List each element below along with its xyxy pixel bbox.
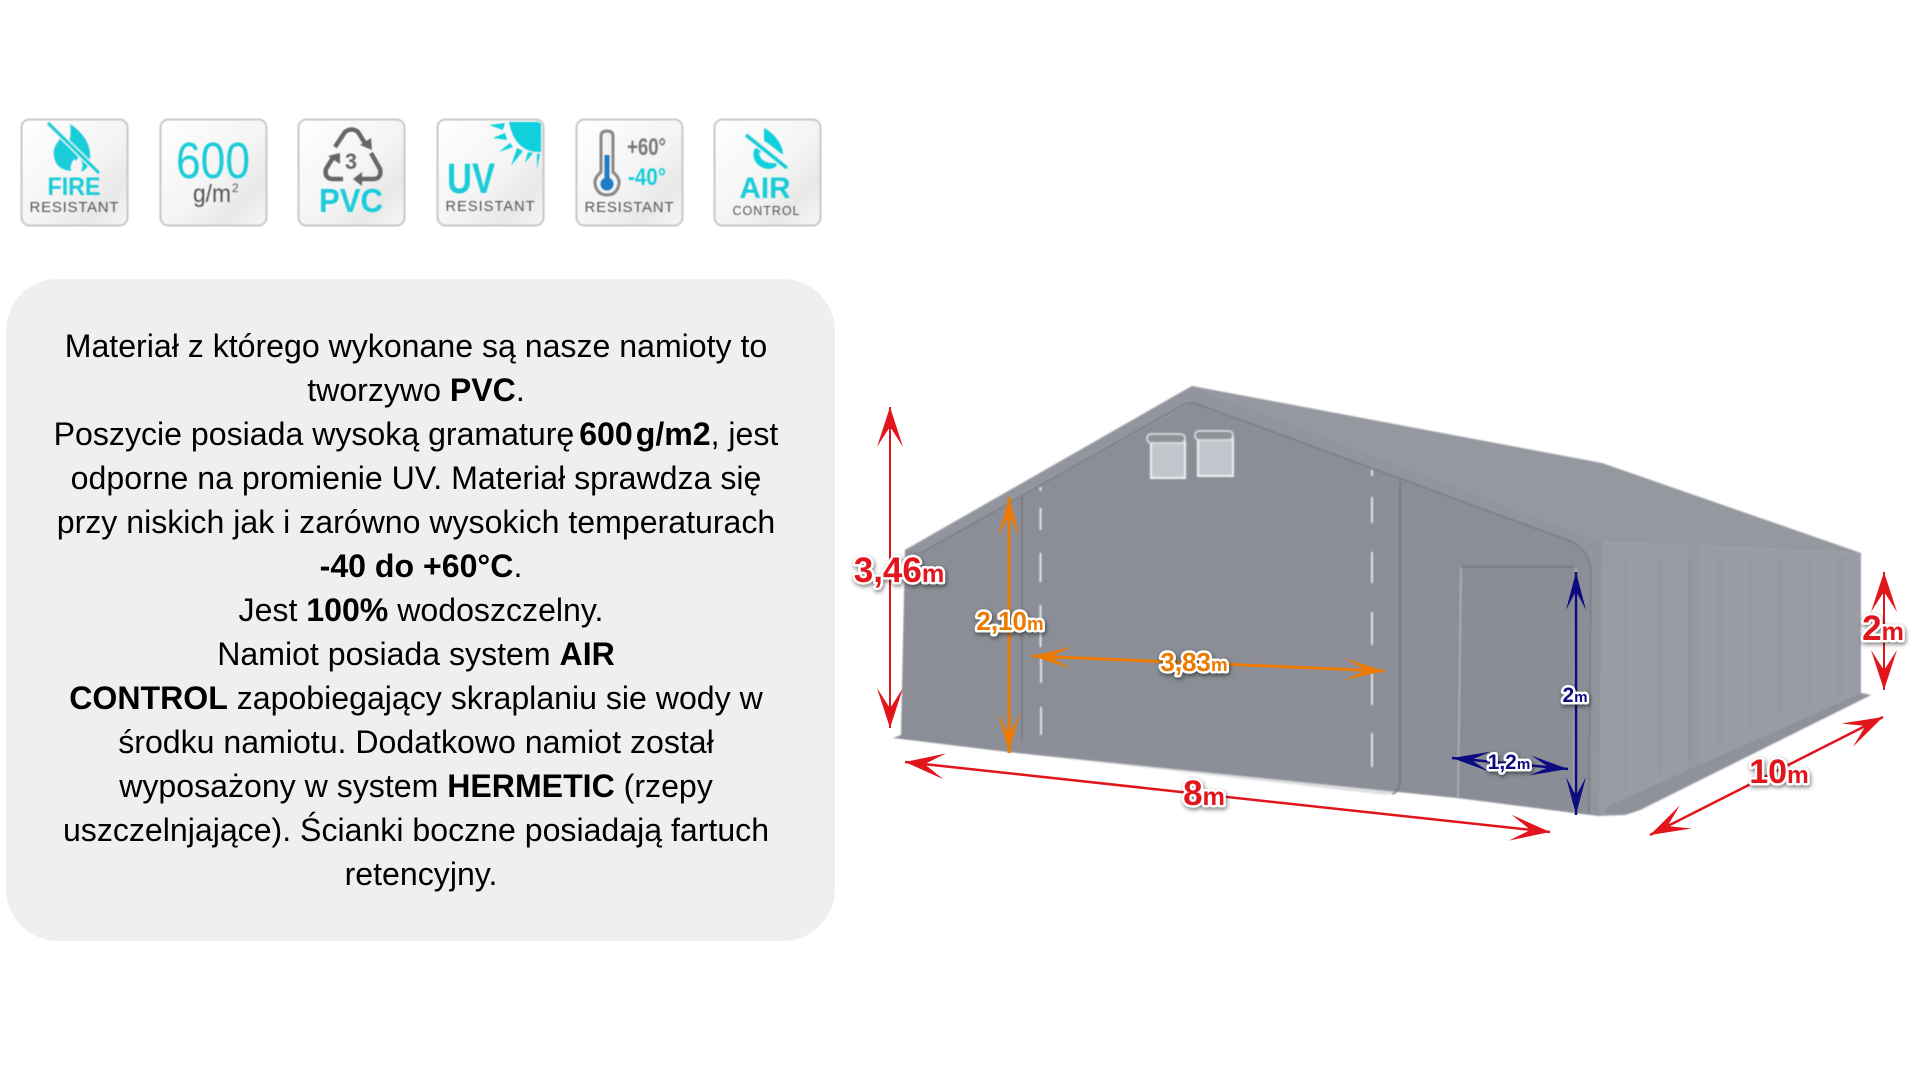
tent: front gable [893, 386, 1602, 816]
text block: description: Poszycie posiada wysoką gramaturę 600g/m2, jest [54, 416, 778, 452]
arrow: side wall 2 m [1883, 572, 1885, 690]
icon: air control [714, 120, 820, 226]
text block: description: retencyjny. [345, 856, 497, 892]
icon: UV resistant: RESISTANT [446, 199, 535, 215]
icon row: material properties [20, 118, 822, 227]
icon: 600 g/m2 [160, 120, 266, 226]
tent: ventilation windows [1147, 431, 1233, 478]
label: 3,83 m: 3,83m [1160, 647, 1228, 677]
arrow: door height 2 m [1575, 572, 1577, 815]
icon: temperature resistant: +60° [627, 134, 666, 161]
text block: description: wyposażony w system HERMETIC (rzepy [119, 768, 713, 804]
icon: UV resistant: UV [447, 155, 495, 203]
tent: white zip dashes [1040, 470, 1372, 767]
icon: temperature resistant: RESISTANT [584, 199, 674, 216]
panel: material description [6, 279, 835, 941]
icon: 600 g/m2: g/m [193, 180, 231, 208]
label: 2 m door height: 2m [1562, 684, 1588, 707]
icon: UV resistant [438, 120, 544, 226]
icon: fire resistant [22, 120, 128, 226]
arrow: total height 3,46 m [889, 407, 891, 728]
tent illustration [893, 386, 1871, 816]
icon: fire resistant: RESISTANT [30, 199, 118, 216]
text block: description: przy niskich jak i zarówno wysokich temperaturach [57, 504, 775, 540]
label: 3,46 m: 3,46m [854, 551, 944, 590]
label: 1,2 m door width: 1,2m [1488, 751, 1530, 774]
tent: roof edge band [905, 386, 1602, 816]
icon: 600 g/m2: 600 [176, 132, 250, 189]
arrow: gate height 2,10 m [1008, 497, 1010, 753]
text block: description: odporne na promienie UV. Materiał sprawdza się [71, 460, 761, 496]
icon: PVC recycling 3: PVC [319, 182, 383, 219]
tent: roof [1192, 386, 1861, 553]
text block: description: Materiał z którego wykonane są nasze namioty to [65, 328, 767, 364]
arrow: gate width 3,83 m [1032, 656, 1384, 671]
arrow: width 8 m [905, 762, 1550, 832]
arrow: depth 10 m [1650, 717, 1883, 835]
text block: description [54, 328, 778, 892]
label: 8 m: 8m [1183, 774, 1225, 813]
icon: air control: CONTROL [732, 204, 800, 218]
tent: side door [1458, 567, 1576, 812]
text block: description: CONTROL zapobiegający skraplaniu sie wody w [69, 680, 763, 716]
label: 2,10 m: 2,10m [976, 606, 1044, 636]
text block: description: Namiot posiada system AIR [217, 636, 615, 672]
arrow: door width 1,2 m [1452, 758, 1568, 769]
tent: side wall [1599, 542, 1871, 816]
tent: door panel seams [1022, 482, 1400, 794]
text block: description: Jest 100% wodoszczelny. [239, 592, 603, 628]
icon: PVC recycling 3: 3 [345, 149, 357, 174]
text block: description: -40 do +60°C. [320, 548, 522, 584]
icon: 600 g/m2: 2 [232, 181, 239, 195]
icon: PVC recycling 3 [298, 120, 404, 226]
icon: air control: AIR [740, 172, 791, 205]
label: 10 m: 10m [1749, 753, 1809, 791]
text block: description: uszczelnjające). Ścianki boczne posiadają fartuch [63, 812, 769, 848]
icon: fire resistant: FIRE [48, 173, 100, 201]
icon: temperature resistant: -40° [628, 164, 666, 191]
label: 2 m side wall: 2m [1862, 609, 1904, 648]
icon: temperature resistant [576, 120, 682, 226]
text block: description: tworzywo PVC. [307, 372, 525, 408]
text block: description: środku namiotu. Dodatkowo namiot został [118, 724, 714, 760]
